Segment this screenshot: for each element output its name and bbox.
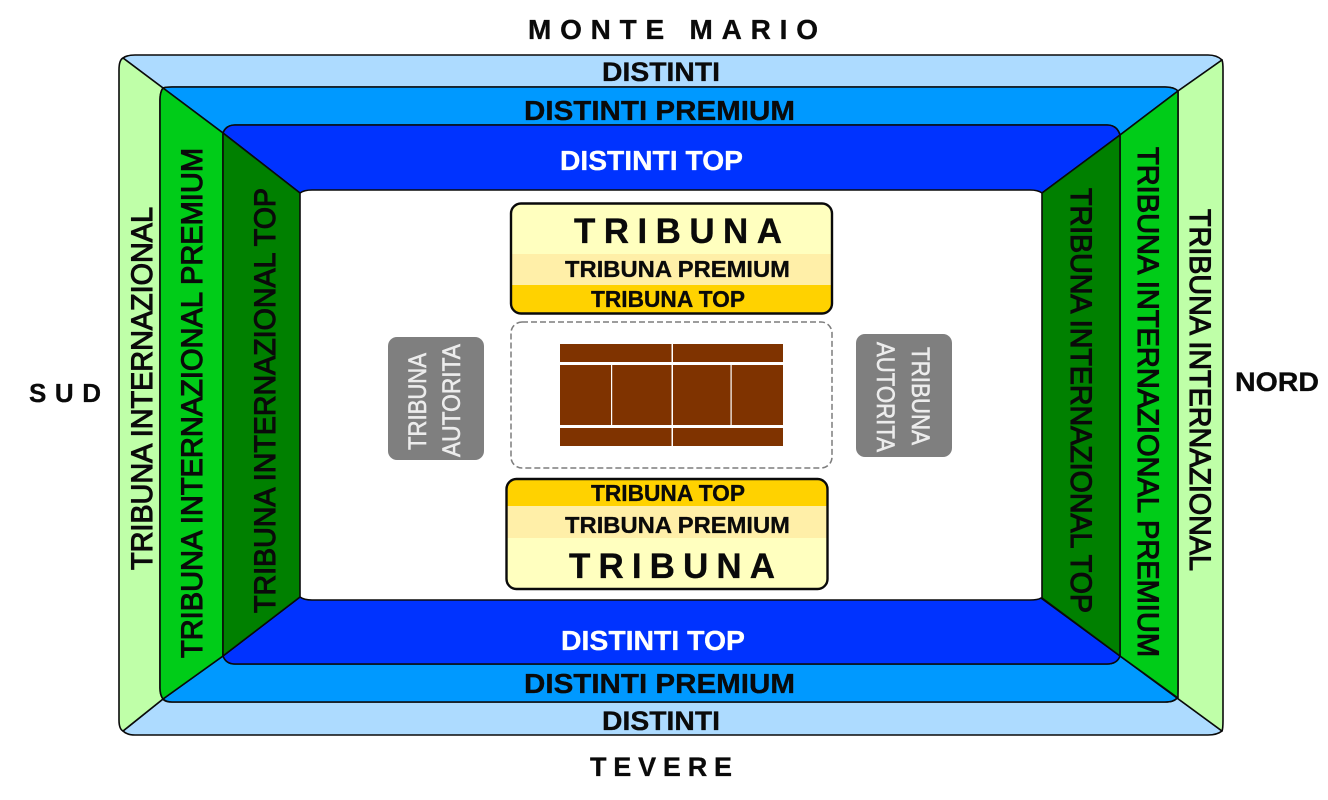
zone: distinti premium bottom side: DISTINTI PREMIUM	[524, 668, 795, 699]
band: tribuna top lower: TRIBUNA TOP	[591, 480, 745, 506]
heading: Tevere: TEVERE	[590, 752, 732, 782]
label: tribuna upper: TRIBUNA	[574, 212, 782, 251]
band: tribuna premium upper	[512, 254, 831, 285]
heading: Sud: SUD	[29, 378, 101, 408]
zone: tribuna internazional top left	[223, 133, 300, 656]
zone: tribuna internazional right: TRIBUNA INTERNAZIONAL	[1183, 209, 1216, 571]
zone: tribuna internazional left: TRIBUNA INTERNAZIONAL	[126, 207, 159, 570]
zone: tribuna internazional left	[119, 58, 163, 731]
zone: distinti top side: DISTINTI	[602, 57, 720, 87]
panel: right stands	[1042, 60, 1223, 731]
panel: bottom stands	[123, 597, 1222, 736]
heading: Nord: NORD	[1235, 367, 1319, 397]
panel: top stands	[123, 55, 1222, 193]
zone: tribuna internazional right	[1177, 60, 1223, 731]
panel: tribuna autorita right: AUTORITA	[871, 342, 899, 452]
panel: lower tribuna block	[506, 479, 828, 589]
band: tribuna premium lower: TRIBUNA PREMIUM	[565, 512, 790, 538]
tennis court	[560, 344, 783, 446]
zone: tribuna internazional premium right: TRIBUNA INTERNAZIONAL PREMIUM	[1131, 147, 1164, 657]
panel: tribuna autorita left: AUTORITA	[438, 344, 466, 457]
zone: tribuna internazional top right	[1042, 135, 1120, 656]
band: tribuna top upper: TRIBUNA TOP	[591, 286, 745, 312]
zone: distinti top, bottom side: DISTINTI TOP	[561, 625, 745, 656]
heading: Monte Mario: MONTE MARIO	[528, 14, 818, 45]
band: tribuna top lower	[507, 480, 827, 506]
panel: court area	[511, 322, 832, 468]
zone: tribuna internazional premium right	[1120, 91, 1178, 698]
band: tribuna premium lower	[507, 506, 827, 538]
zone: tribuna internazional top right: TRIBUNA INTERNAZIONAL TOP	[1064, 188, 1097, 613]
zone: distinti top, bottom side	[223, 597, 1120, 664]
band: tribuna top upper	[512, 285, 831, 313]
panel: tribuna autorita left: TRIBUNA	[404, 353, 432, 450]
zone: distinti premium top side	[163, 87, 1178, 135]
zone: tribuna internazional top left: TRIBUNA INTERNAZIONAL TOP	[249, 188, 282, 613]
zone: distinti top, top side: DISTINTI TOP	[560, 145, 743, 176]
label: tribuna lower: TRIBUNA	[569, 547, 775, 586]
zone: distinti premium top side: DISTINTI PREMIUM	[524, 95, 795, 126]
zone: distinti top side	[123, 55, 1222, 91]
zone: distinti bottom side	[123, 698, 1222, 736]
panel: tribuna autorita right	[856, 334, 952, 457]
zone: tribuna internazional premium left: TRIBUNA INTERNAZIONAL PREMIUM	[176, 148, 209, 658]
zone: distinti top, top side	[223, 125, 1120, 193]
panel: upper tribuna block	[511, 204, 832, 314]
panel: tribuna autorita right: TRIBUNA	[906, 347, 934, 445]
panel: tribuna autorita left	[388, 337, 484, 460]
panel: left stands	[119, 58, 300, 731]
zone: distinti premium bottom side	[163, 656, 1177, 702]
zone: tribuna internazional premium left	[160, 88, 223, 699]
zone: distinti bottom side: DISTINTI	[602, 706, 720, 736]
band: tribuna premium upper: TRIBUNA PREMIUM	[565, 256, 790, 282]
